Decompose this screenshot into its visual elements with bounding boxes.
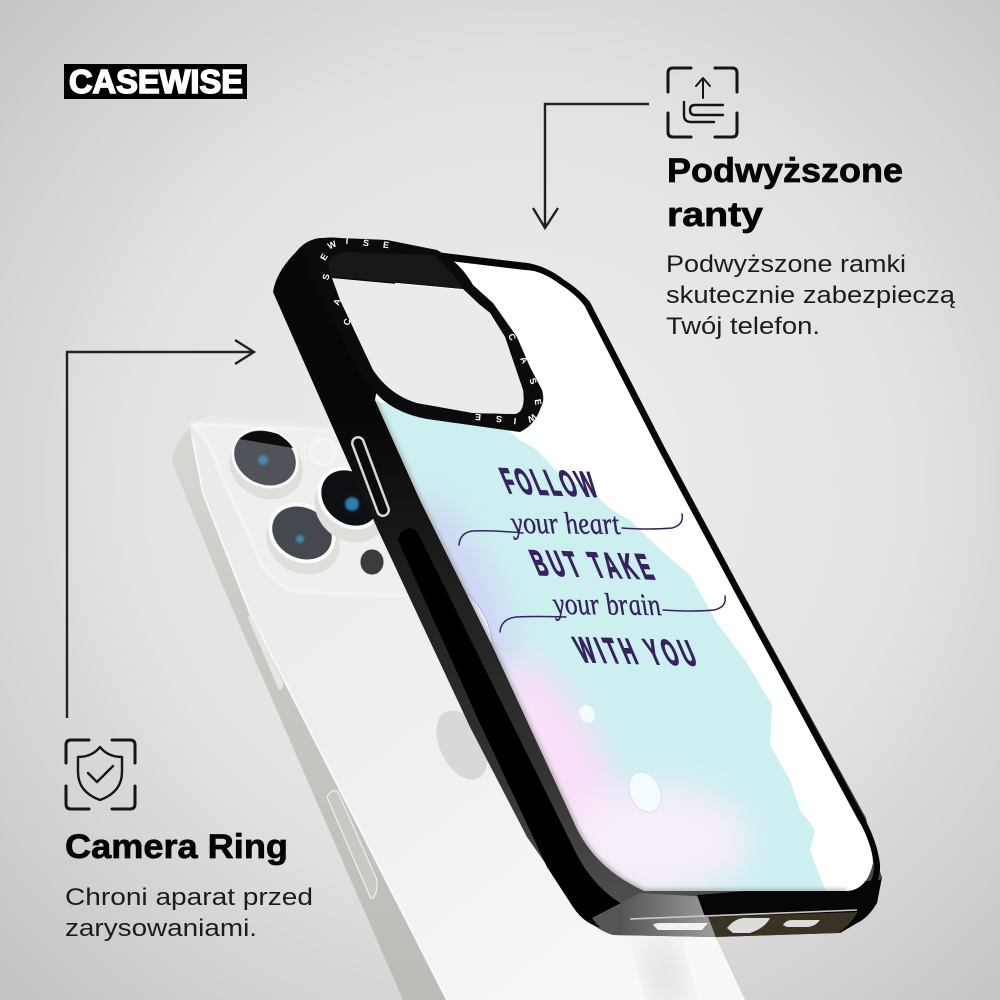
your brain: your brain — [545, 587, 665, 622]
side band inner highlight — [192, 436, 447, 1000]
case shell — [273, 238, 882, 937]
heading: Camera Ring: Camera Ring — [65, 828, 288, 866]
ring lettering: E — [318, 252, 330, 262]
camera ring — [305, 236, 543, 432]
bottom lip grey — [592, 893, 715, 937]
text: raised edges description — [666, 251, 956, 340]
speaker hole — [653, 923, 708, 930]
WITH YOU: WITH YOU — [568, 630, 703, 674]
ring lettering — [318, 236, 543, 426]
phone case — [273, 238, 882, 937]
lens right — [300, 453, 400, 557]
apple logo — [426, 702, 498, 788]
soft shade on phone back — [641, 933, 689, 1000]
watercolor wash — [360, 400, 830, 900]
bottom lip black — [697, 877, 882, 933]
panel edge shading — [375, 400, 847, 891]
quotation lettering — [459, 461, 725, 674]
heading: Podwyższone ranty: Podwyższone — [667, 152, 903, 190]
case right edge outline — [460, 259, 877, 895]
ring lettering: E — [382, 240, 390, 250]
text: camera ring description — [65, 884, 313, 942]
ring lettering: W — [326, 238, 338, 251]
white phone behind the case — [172, 416, 745, 1000]
flourish brain — [500, 596, 725, 632]
text: camera ring description: zarysowaniami. — [65, 915, 257, 942]
bottom lip bronze — [708, 912, 858, 937]
ring lettering: I — [513, 416, 517, 426]
printed back panel — [375, 262, 873, 891]
usb port — [727, 918, 770, 933]
heading: Podwyższone ranty — [667, 152, 903, 234]
icon: raised edges — [668, 68, 737, 137]
ring lettering: C — [341, 317, 353, 327]
BUT TAKE: BUT TAKE — [524, 543, 660, 588]
camera plateau — [192, 424, 425, 596]
side button lower — [327, 791, 377, 899]
side slot — [398, 528, 628, 928]
ring lettering: A — [331, 297, 343, 307]
droplets — [467, 593, 667, 817]
lilac wash — [421, 500, 518, 674]
phone side band — [172, 427, 447, 1000]
ring lettering: W — [525, 412, 538, 425]
ring body — [305, 238, 543, 432]
arrow: to raised edges — [533, 104, 649, 228]
flourish heart — [459, 514, 682, 545]
flash — [310, 439, 336, 465]
icon: shield — [66, 740, 135, 809]
ring lettering: C — [506, 332, 518, 343]
side button upper — [248, 613, 283, 690]
pale wash — [570, 785, 750, 895]
your heart: your heart — [503, 506, 625, 541]
ring inner wall — [328, 252, 463, 289]
lip highlight — [630, 910, 857, 919]
arrow: to camera ring — [67, 340, 254, 718]
ring lettering: S — [527, 376, 539, 386]
ring lettering: S — [496, 414, 502, 424]
sensor — [360, 549, 384, 575]
ring lettering: S — [320, 273, 332, 281]
text: camera ring description: Chroni aparat przed — [65, 884, 313, 911]
logo: CASEWISE: CASEWISE — [69, 63, 243, 100]
phone body — [172, 416, 745, 1000]
white base — [375, 262, 873, 891]
ring inner opening — [332, 278, 524, 414]
lens bottom — [254, 491, 352, 587]
volume button — [358, 443, 383, 510]
ring lettering: E — [475, 412, 481, 422]
heading: Podwyższone ranty: ranty — [667, 196, 763, 234]
ring lettering: S — [362, 238, 370, 248]
lens top left — [217, 416, 315, 512]
pink wash — [502, 648, 629, 883]
text: raised edges description: Twój telefon. — [666, 313, 820, 340]
text: raised edges description: skutecznie zabezpieczą — [666, 282, 956, 309]
text: raised edges description: Podwyższone ramki — [666, 251, 906, 278]
ring lettering: A — [518, 355, 530, 366]
FOLLOW: FOLLOW — [494, 461, 604, 505]
ring lettering: E — [533, 398, 543, 406]
mic hole — [783, 920, 820, 927]
ring lettering: I — [345, 236, 349, 246]
